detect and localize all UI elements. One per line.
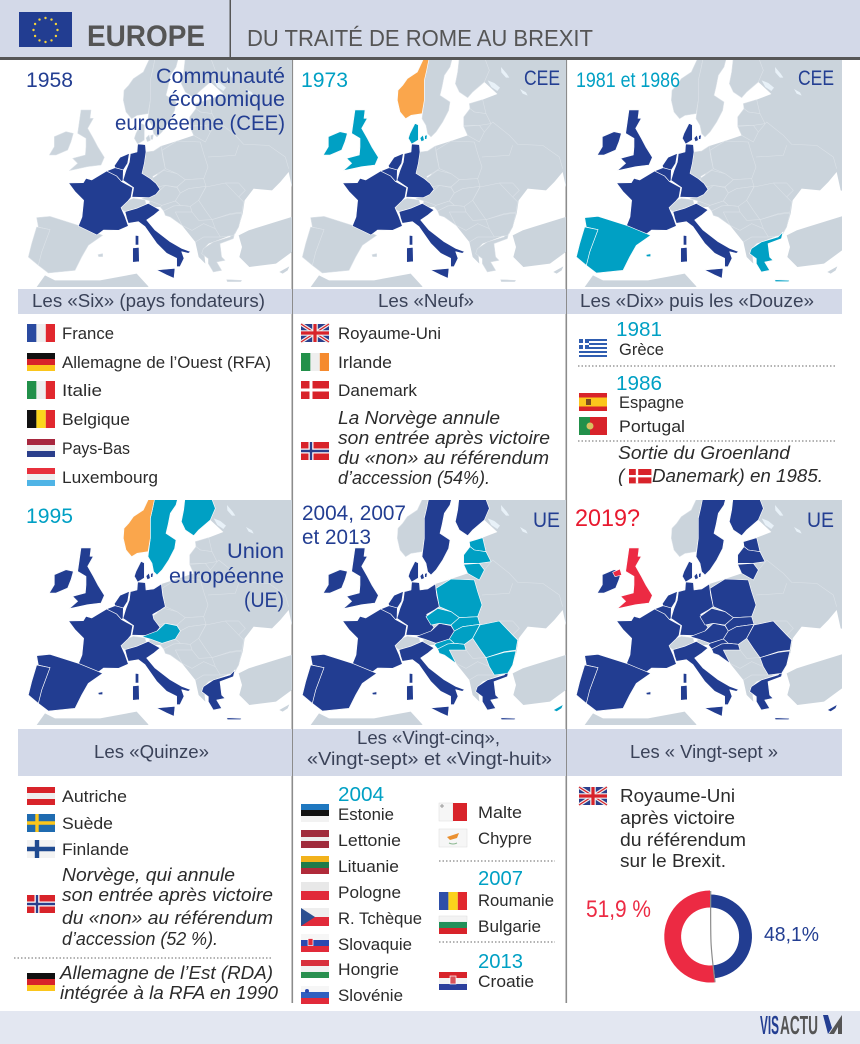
list: 2004: Malte [478, 803, 522, 822]
note: Greenland: Sortie du Groenland [618, 442, 791, 463]
logo: Visactu: ACTU [780, 1010, 818, 1040]
value: 48,1 %: 48,1% [764, 924, 819, 946]
heading: Union européenne: Union [227, 540, 284, 563]
note: Greenland: ( [618, 465, 626, 486]
years 2004, 2007 et 2013: 2004, 2007 [302, 502, 406, 525]
band: Vingt-cinq, Vingt-sept, Vingt-huit [293, 728, 566, 776]
map: 2019 [576, 495, 847, 728]
donut chart: Brexit vote [664, 890, 752, 982]
list: founding countries [27, 324, 271, 487]
note: Norway 1973: du «non» au référendum [338, 447, 549, 468]
list: 2007: 2007 [478, 868, 523, 890]
panel: 1995 [14, 495, 299, 1003]
header band [0, 0, 860, 60]
list: 1995 countries: Suède [62, 814, 113, 833]
map: 1981-1986 [576, 57, 847, 290]
note: Greenland [618, 442, 823, 486]
band: les Neuf [293, 289, 566, 314]
map: 1973 [302, 57, 573, 290]
band: Vingt-cinq, Vingt-sept, Vingt-huit: Les «Vingt-cinq», [357, 728, 500, 748]
list: founding countries: Belgique [62, 410, 130, 429]
note: Royaume-Uni Brexit: du référendum [620, 830, 746, 850]
band: les Dix puis les Douze [567, 289, 842, 314]
list: 2004: Pologne [338, 883, 401, 902]
list: founding countries: Luxembourg [62, 468, 158, 487]
footer band [0, 1010, 860, 1044]
year 1958: 1958 [26, 69, 73, 92]
note: RDA: Allemagne de l’Est (RDA) [59, 962, 273, 983]
list: 1973 countries [301, 324, 441, 400]
list: 2004: Lituanie [338, 857, 399, 876]
note: Norway 1973: La Norvège annule [338, 407, 500, 428]
panel: 1973 [293, 57, 573, 488]
years 2004, 2007 et 2013: et 2013 [302, 526, 371, 549]
list: 1995 countries [27, 787, 129, 859]
list: 2013: 2013 [478, 951, 523, 973]
list: founding countries: Pays-Bas [62, 439, 130, 458]
list: 2004 [301, 784, 532, 1005]
label UE: UE [533, 509, 560, 532]
list: 2004: Slovaquie [338, 935, 412, 954]
logo: Visactu: VIS [760, 1010, 779, 1040]
list: 1986: Espagne [619, 393, 684, 412]
heading: Communauté économique européenne [115, 65, 285, 135]
year 1995: 1995 [26, 505, 73, 528]
label CEE: CEE [798, 67, 834, 90]
panel: 1958 [18, 57, 299, 487]
list: 1973 countries: Danemark [338, 381, 417, 400]
band: les Neuf: Les «Neuf» [378, 291, 474, 311]
band: les Dix puis les Douze: Les «Dix» puis les «Douze» [580, 291, 814, 311]
column divider lines [292, 60, 567, 1003]
list: 1973 countries: Royaume-Uni [338, 324, 441, 343]
map: 2004-2013 [302, 495, 573, 728]
heading: Union européenne: européenne [169, 565, 284, 588]
note: Norway 1995: son entrée après victoire [62, 884, 273, 905]
list: 2004: Slovénie [338, 986, 403, 1005]
list: 2007: Bulgarie [478, 917, 541, 936]
list: 2004: Hongrie [338, 960, 399, 979]
note: Norway 1995: du «non» au référendum [62, 907, 273, 928]
heading: Union européenne [169, 540, 284, 612]
year 1981 et 1986: 1981 et 1986 [576, 69, 680, 92]
panel: 2004 2007 2013 [293, 495, 573, 1005]
label UE: UE [807, 509, 834, 532]
note: Norway 1995 [27, 864, 273, 949]
note: Royaume-Uni Brexit: sur le Brexit. [620, 851, 726, 871]
list: 2007: Roumanie [478, 891, 554, 910]
list: 2004: 2004 [338, 784, 384, 806]
list: founding countries: France [62, 324, 114, 343]
list: founding countries: Allemagne de l’Ouest (RFA) [62, 353, 271, 372]
note: RDA [27, 962, 279, 1003]
list: founding countries: Italie [62, 381, 102, 400]
list: 1986: Portugal [619, 417, 685, 436]
logo: Visactu [760, 1010, 842, 1040]
note: RDA: intégrée à la RFA en 1990 [60, 982, 279, 1003]
band: les Six: Les «Six» (pays fondateurs) [32, 291, 265, 311]
panel: 1981 et 1986 [567, 57, 847, 486]
list: 1981: Grèce [619, 340, 664, 359]
title: EUROPE [87, 20, 205, 53]
list: 2007 [439, 868, 554, 936]
note: Royaume-Uni Brexit [579, 786, 746, 871]
note: Norway 1973: d’accession (54%). [338, 467, 490, 488]
icon: EU flag [19, 12, 72, 47]
note: Royaume-Uni Brexit: après victoire [620, 808, 735, 828]
year 2019?: 2019? [575, 505, 640, 532]
year 1973: 1973 [301, 69, 348, 92]
list: 2004: R. Tchèque [338, 909, 422, 928]
list: 1981: 1981 [616, 319, 662, 341]
value: 51,9 %: 51,9 % [586, 896, 651, 923]
band: les Six [18, 289, 292, 314]
list: 1995 countries: Autriche [62, 787, 127, 806]
subtitle: DU TRAITÉ DE ROME AU BREXIT [247, 25, 593, 51]
map: 1958 [28, 57, 299, 290]
heading: Communauté économique européenne: européenne (CEE) [115, 112, 285, 135]
list: 1986 [579, 373, 685, 436]
note: Norway 1995: Norvège, qui annule [62, 864, 235, 885]
heading: Communauté économique européenne: Communauté [156, 65, 285, 88]
panel: 2019 [567, 495, 847, 982]
note: Norway 1995: d’accession (52 %). [62, 928, 218, 949]
note: Norway 1973 [301, 407, 550, 488]
heading: Communauté économique européenne: économique [168, 88, 285, 111]
list: 2004: Estonie [338, 805, 394, 824]
list: 1986: 1986 [616, 373, 662, 395]
label CEE: CEE [524, 67, 560, 90]
map: 1995 [28, 495, 299, 728]
note: Greenland: Danemark) en 1985. [652, 465, 823, 486]
list: 2004: Chypre [478, 829, 532, 848]
note: Norway 1973: son entrée après victoire [338, 427, 550, 448]
band: les Quinze: Les «Quinze» [94, 742, 209, 762]
list: 1973 countries: Irlande [338, 353, 392, 372]
heading: Union européenne: (UE) [244, 589, 284, 612]
list: 2013: Croatie [478, 972, 534, 991]
band: les Quinze [18, 729, 292, 776]
list: 2004: Lettonie [338, 831, 401, 850]
band: Vingt-cinq, Vingt-sept, Vingt-huit: «Vingt-sept» et «Vingt-huit» [307, 749, 552, 769]
note: Royaume-Uni Brexit: Royaume-Uni [620, 786, 735, 806]
band: Vingt-sept: Les « Vingt-sept » [630, 742, 778, 762]
list: 1995 countries: Finlande [62, 840, 129, 859]
list: 2013 [439, 951, 534, 991]
years 2004, 2007 et 2013 [302, 502, 406, 549]
band: Vingt-sept [567, 729, 842, 776]
list: 1981 [579, 319, 664, 359]
